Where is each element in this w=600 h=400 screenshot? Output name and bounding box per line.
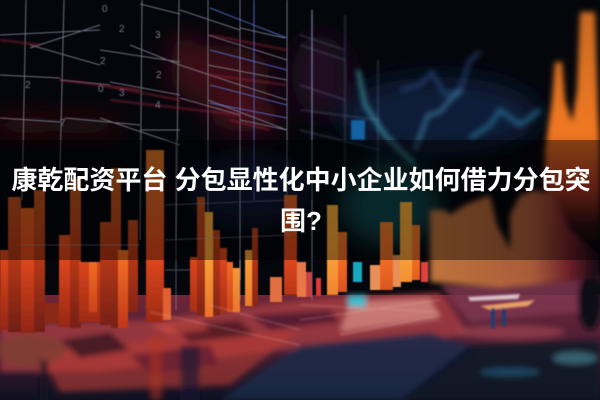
floor — [0, 295, 600, 400]
colour haze — [0, 35, 540, 245]
axis numerals: 3 — [119, 88, 125, 99]
axis numerals: 0 — [98, 84, 104, 95]
middle cluster — [190, 257, 198, 312]
right cluster — [327, 205, 338, 295]
axis numerals: 2 — [156, 70, 162, 81]
grid lines — [0, 0, 312, 280]
title: 康乾配资平台 分包显性化中小企业如何借力分包突 — [11, 165, 591, 195]
axis numerals: 4 — [155, 100, 161, 111]
axis numerals: 2 — [25, 80, 31, 91]
floor mosaic — [0, 270, 600, 400]
title: 围? — [280, 206, 322, 236]
blue grid lines — [210, 0, 287, 200]
axis numerals: 3 — [155, 30, 161, 41]
bars — [0, 150, 428, 333]
axis numerals — [25, 4, 162, 129]
red grid streaks — [0, 35, 287, 130]
axis numerals: 2 — [100, 56, 106, 67]
title band overlay — [0, 140, 600, 260]
axis numerals: 0 — [102, 4, 108, 15]
right orange spikes — [545, 12, 600, 240]
floor lines — [150, 300, 440, 345]
axis numerals: 7 — [60, 118, 66, 129]
blue line chart — [358, 52, 540, 165]
axis numerals: 2 — [119, 24, 125, 35]
title — [11, 165, 591, 236]
blue block — [351, 120, 365, 140]
right grid faint — [300, 10, 380, 180]
floor object — [468, 294, 535, 328]
left cluster — [0, 250, 8, 330]
blurred right bars — [430, 190, 600, 288]
lower grid overlay — [22, 140, 312, 310]
